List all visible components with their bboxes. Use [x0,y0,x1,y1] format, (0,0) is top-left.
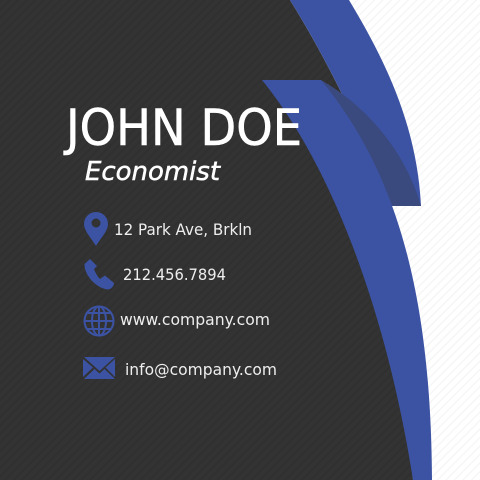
icon: phone [84,259,114,290]
subtitle: job title: Economist [85,157,221,187]
address text: 12 Park Ave, Brkln [114,220,252,239]
email text: info@company.com [125,360,277,379]
website text: www.company.com [120,310,270,329]
icon: globe [84,306,114,336]
shaded swoosh overlap [321,80,421,206]
lower blue swoosh [262,80,432,480]
icon: location pin [84,212,108,246]
icon: envelope [83,357,115,379]
upper blue swoosh [290,0,421,206]
phone text: 212.456.7894 [123,265,226,284]
title: name: JOHN DOE [63,99,302,157]
